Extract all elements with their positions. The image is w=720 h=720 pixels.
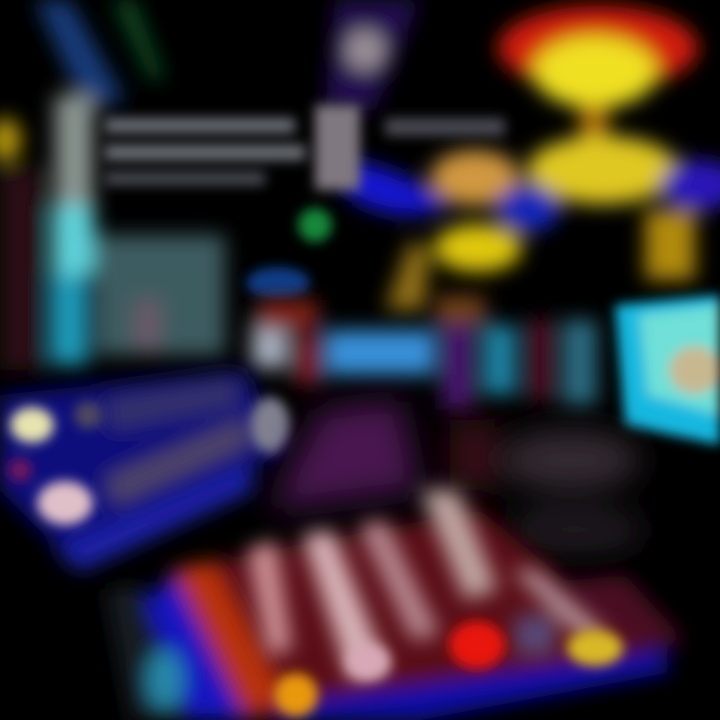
heading: blurred title text (105, 105, 505, 299)
panel: right screen (615, 295, 720, 445)
panel: deck keys (248, 490, 608, 680)
panel: right dark table (450, 420, 645, 552)
panel: left blue console (0, 370, 285, 572)
panel: middle band of machines (252, 295, 597, 410)
icon: console buttons (8, 397, 290, 525)
panel: purple floor (270, 400, 420, 510)
panel: control deck (105, 510, 685, 720)
panel: left wall (0, 0, 225, 370)
panel: ceiling lights (325, 0, 720, 310)
icon: deck buttons (274, 621, 623, 717)
